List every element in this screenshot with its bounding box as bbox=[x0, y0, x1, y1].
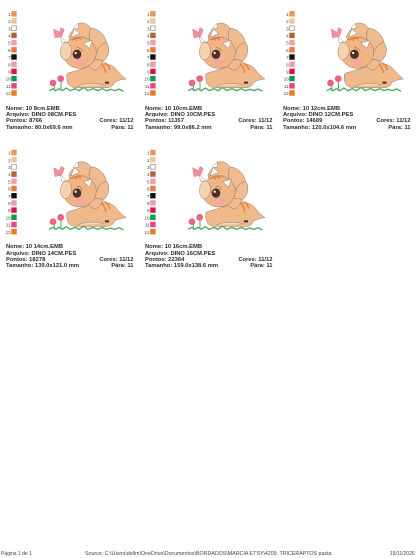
panel 3 art bbox=[284, 11, 403, 96]
panel 2 text: Arquivo: DINO 10CM.PES bbox=[145, 112, 215, 118]
panel 3 text: Nome: 10 12cm.EMB bbox=[283, 106, 340, 112]
swatches bbox=[144, 11, 156, 96]
panel 5 text: Tamanho: 159.0x138.6 mm bbox=[145, 263, 218, 269]
panel 1 text: Pontos: 8766 bbox=[6, 118, 42, 124]
panel 5 text: Pára: 11 bbox=[250, 263, 272, 269]
swatches bbox=[144, 150, 156, 235]
dino bbox=[189, 23, 265, 91]
dino bbox=[50, 162, 126, 230]
panel 1 text: Arquivo: DINO 08CM.PES bbox=[6, 112, 76, 118]
panel 3 text: Tamanho: 120.0x104.6 mm bbox=[283, 125, 356, 131]
panel 4 text: Tamanho: 139.0x121.0 mm bbox=[6, 263, 79, 269]
footer: source path: Source: C:\Users\dellm\OneDrive\Documentos\BORDADOS\MARCIA ETSY\4209. TRICERAPTOS pasta bbox=[85, 550, 332, 556]
swatches bbox=[6, 11, 17, 96]
panel 2 text: Tamanho: 99.0x86.2 mm bbox=[145, 125, 212, 131]
dino bbox=[327, 23, 403, 91]
panel 5 art bbox=[144, 150, 265, 235]
footer: page number: Página 1 de 1 bbox=[1, 550, 32, 556]
panel 4 text: Pára: 11 bbox=[111, 263, 134, 269]
panel 3 text: Pára: 11 bbox=[388, 125, 410, 131]
panel 5 text: Nome: 10 16cm.EMB bbox=[145, 244, 202, 250]
panel 1 art bbox=[6, 11, 126, 96]
panel 2 text bbox=[145, 106, 272, 131]
panel 2 art bbox=[144, 11, 265, 96]
dino bbox=[50, 23, 126, 91]
panel 1 text: Nome: 10 8cm.EMB bbox=[6, 106, 60, 112]
panel 2 text: Nome: 10 10cm.EMB bbox=[145, 106, 202, 112]
panel 4 art bbox=[6, 150, 126, 235]
panel 5 text bbox=[145, 244, 272, 269]
panel 1 text: Pára: 11 bbox=[111, 125, 134, 131]
swatches bbox=[6, 150, 17, 235]
panel 5 text: Cores: 11/12 bbox=[238, 257, 272, 263]
panel 2 text: Pára: 11 bbox=[250, 125, 272, 131]
panel 1 text: Tamanho: 80.0x69.6 mm bbox=[6, 125, 73, 131]
panel 4 text: Cores: 11/12 bbox=[99, 257, 134, 263]
panel 5 text: Arquivo: DINO 16CM.PES bbox=[145, 251, 215, 257]
panel 1 text bbox=[6, 106, 134, 131]
panel 4 text: Arquivo: DINO 14CM.PES bbox=[6, 251, 76, 257]
panel 3 text: Pontos: 14689 bbox=[283, 118, 322, 124]
swatches bbox=[284, 11, 295, 96]
footer: date: 15/11/2025 bbox=[390, 550, 415, 556]
panel 3 text bbox=[283, 106, 410, 131]
panel 2 text: Cores: 11/12 bbox=[238, 118, 272, 124]
panel 3 text: Arquivo: DINO 12CM.PES bbox=[283, 112, 353, 118]
panel 4 text: Nome: 10 14cm.EMB bbox=[6, 244, 63, 250]
panel 1 text: Cores: 11/12 bbox=[99, 118, 134, 124]
panel 4 text: Pontos: 18278 bbox=[6, 257, 45, 263]
panel 5 text: Pontos: 22364 bbox=[145, 257, 184, 263]
panel 4 text bbox=[6, 244, 134, 269]
panel 2 text: Pontos: 11357 bbox=[145, 118, 184, 124]
dino bbox=[189, 162, 265, 230]
panel 3 text: Cores: 11/12 bbox=[376, 118, 410, 124]
